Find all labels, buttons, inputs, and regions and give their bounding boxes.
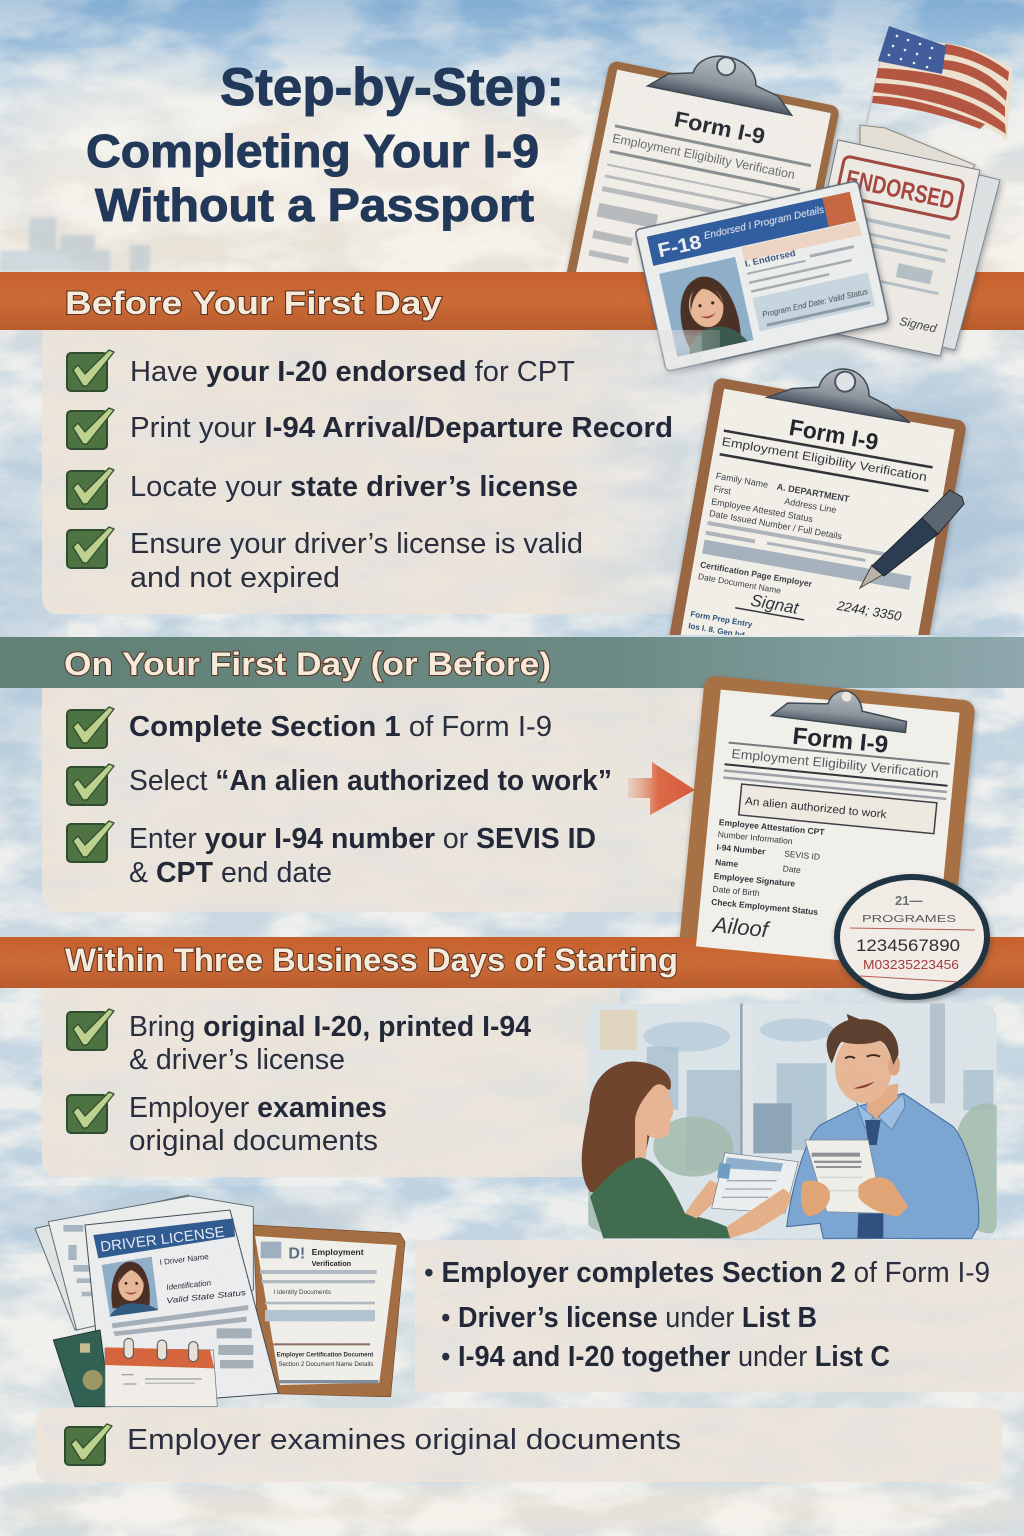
illustration: clipboard 3: Employment Eligibility Verification — [731, 746, 939, 781]
skyline silhouette — [0, 218, 150, 272]
illustration: clipboard 2 with pen: Address Line — [784, 496, 837, 515]
illustration: clipboard 1 with Form I-9: Form I-9 — [672, 106, 767, 149]
illustration: clipboard 3 — [677, 675, 976, 990]
employment form on clipboard: Verification — [312, 1259, 352, 1268]
bullet: list C: • I-94 and I-20 together under List C — [441, 1341, 890, 1373]
illustration: clipboard 3: Number Information — [717, 829, 793, 846]
illustration: I-20 card with portrait — [635, 181, 889, 372]
employment form on clipboard — [253, 1225, 405, 1397]
check item: alien authorized: Select “An alien authorized to work” — [129, 765, 612, 797]
driver license: Identification — [166, 1278, 212, 1292]
illustration: I-20 card with portrait: Program End Date: Valid Status — [761, 286, 869, 319]
employment form on clipboard: Employer Certification Document — [277, 1352, 374, 1359]
icon: magnifying glass: 1234567890 — [856, 936, 960, 955]
illustration: clipboard 3: Employee Signature — [713, 871, 796, 889]
driver license: DRIVER LICENSE — [100, 1224, 226, 1256]
illustration: I-20 card with portrait: Endorsed I Program Details — [703, 205, 825, 242]
illustration: endorsed I-20 document: ENDORSED — [843, 165, 957, 215]
check item: originals — [65, 1424, 681, 1465]
band: Before Your First Day: Before Your First Day — [65, 285, 442, 321]
woman — [582, 1062, 731, 1238]
driver license — [85, 1210, 278, 1407]
check item: license: Locate your state driver’s license — [130, 471, 578, 503]
title — [86, 58, 564, 231]
illustration: clipboard 2 with pen: Certification Page Employer — [699, 559, 813, 589]
check item: valid license — [67, 527, 583, 594]
illustration: employer and employee exchanging documents — [580, 1003, 1020, 1238]
illustration: clipboard 3: Ailoof — [710, 912, 772, 942]
band: Within Three Business Days: Within Three Business Days of Starting — [65, 942, 678, 978]
illustration: clipboard 3: Check Employment Status — [711, 897, 819, 917]
illustration: clipboard 2 with pen: First — [713, 484, 732, 497]
illustration: clipboard 2 with pen: Employment Eligibility Verification — [721, 434, 928, 484]
illustration: clipboard 3: I-94 Number — [716, 842, 767, 857]
arrow — [628, 762, 695, 815]
illustration: clipboard 3: Date — [782, 863, 801, 875]
illustration: clipboard 3: Date of Birth — [712, 884, 760, 898]
check item: I-20: Have your I-20 endorsed for CPT — [130, 356, 575, 388]
illustration: pile of documents — [35, 1195, 405, 1407]
illustration: endorsed I-20 document — [798, 125, 1000, 356]
illustration: clipboard 2 with pen: Date Document Name — [697, 571, 782, 596]
illustration: clipboard 1 with Form I-9 — [564, 55, 842, 272]
panel: employer completes section 2 — [415, 1240, 1024, 1392]
check item: valid license: and not expired — [130, 562, 340, 594]
panel: Before Your First Day checklist — [42, 330, 720, 614]
check item: I-94 — [67, 408, 673, 449]
check item: valid license: Ensure your driver’s license is valid — [130, 528, 583, 560]
metal clip — [646, 55, 794, 116]
driver license: Valid State Status — [166, 1288, 246, 1305]
check item: I-94: Print your I-94 Arrival/Departure Record — [130, 412, 673, 444]
illustration: clipboard 2 with pen: Ios I. 8. Gen bd — [688, 621, 745, 640]
calendar — [105, 1338, 217, 1407]
illustration: clipboard 2 with pen: Form I-9 — [787, 414, 880, 455]
icon: pen — [860, 490, 964, 588]
check item: originals: Employer examines original documents — [127, 1424, 681, 1456]
panel: bottom checklist item — [36, 1408, 1002, 1482]
check item: I-94 number: & CPT end date — [129, 857, 332, 889]
illustration: endorsed I-20 document: Signed — [898, 314, 938, 335]
document held by man — [805, 1140, 883, 1213]
check item: bring originals — [67, 1009, 531, 1076]
panel: Within Three Business Days checklist — [42, 988, 620, 1177]
check item: employer examines: original documents — [129, 1125, 378, 1157]
illustration: clipboard 2 with pen: Form Prep Entry — [690, 609, 754, 629]
illustration: clipboard 3: Employee Attestation CPT — [718, 817, 826, 837]
illustration: clipboard 3: An alien authorized to work — [744, 795, 888, 821]
check item: license — [67, 468, 578, 509]
check item: alien authorized — [67, 764, 612, 805]
check item: section 1 — [67, 707, 552, 748]
illustration: american flag — [866, 22, 1012, 141]
employment form on clipboard: Employment — [312, 1247, 364, 1257]
icon: magnifying glass: PROGRAMES — [862, 913, 956, 925]
band: Before Your First Day — [0, 272, 1024, 330]
man — [787, 1014, 979, 1238]
bullet: section 2: • Employer completes Section 2 of Form I-9 — [424, 1257, 990, 1289]
panel: On Your First Day checklist — [42, 688, 730, 912]
employment form on clipboard: D! — [288, 1245, 305, 1262]
title: Without a Passport — [95, 179, 534, 231]
employee documents — [712, 1153, 798, 1238]
title: Completing Your I-9 — [86, 125, 539, 177]
check item: employer examines — [67, 1092, 387, 1157]
license portrait — [109, 1262, 158, 1317]
illustration: clipboard 3: SEVIS ID — [784, 848, 820, 862]
band: On Your First Day — [0, 637, 1024, 688]
title: Step-by-Step: — [220, 58, 564, 117]
illustration: clipboard 2 with pen: Signat — [749, 591, 801, 618]
illustration: clipboard 3: Form I-9 — [791, 723, 889, 759]
illustration: I-20 card with portrait: I. Endorsed — [744, 248, 797, 270]
band: On Your First Day: On Your First Day (or Before) — [64, 646, 551, 682]
driver license: I Driver Name — [159, 1252, 210, 1267]
band: Within Three Business Days — [0, 937, 1024, 988]
check item: section 1: Complete Section 1 of Form I-9 — [129, 711, 552, 743]
icon: magnifying glass — [837, 877, 987, 997]
illustration: clipboard 2 with pen — [667, 368, 970, 635]
illustration: clipboard 3: Name — [715, 857, 739, 869]
illustration: clipboard 2 with pen: Date Issued Number / Full Details — [708, 508, 843, 541]
illustration: clipboard 2 with pen: Employee Attested Status — [710, 496, 814, 524]
illustration: I-20 card with portrait: F-18 — [656, 232, 704, 262]
bullet: list B: • Driver’s license under List B — [441, 1302, 817, 1334]
illustration: clipboard 2 with pen: A. DEPARTMENT — [776, 481, 851, 504]
portrait — [672, 270, 748, 354]
passport — [53, 1330, 110, 1407]
icon: magnifying glass: 21— — [895, 893, 922, 908]
check item: employer examines: Employer examines — [129, 1092, 387, 1124]
check item: bring originals: Bring original I-20, printed I-94 — [129, 1011, 531, 1043]
illustration: clipboard 2 with pen: Family Name — [715, 471, 769, 490]
employment form on clipboard: Section 2 Document Name Details — [278, 1361, 373, 1368]
office window with skyline — [580, 1003, 1020, 1238]
check item: I-94 number: Enter your I-94 number or SEVIS ID — [129, 823, 596, 855]
illustration: clipboard 2 with pen: 2244; 3350 — [835, 598, 903, 624]
illustration: clipboard 1 with Form I-9: Employment Eligibility Verification — [611, 131, 796, 182]
check item: I-94 number — [67, 821, 596, 889]
check item: bring originals: & driver’s license — [129, 1044, 345, 1076]
check item: I-20 — [67, 350, 575, 391]
icon: magnifying glass: M03235223456 — [863, 958, 959, 972]
employment form on clipboard: I Identity Documents — [273, 1289, 331, 1296]
